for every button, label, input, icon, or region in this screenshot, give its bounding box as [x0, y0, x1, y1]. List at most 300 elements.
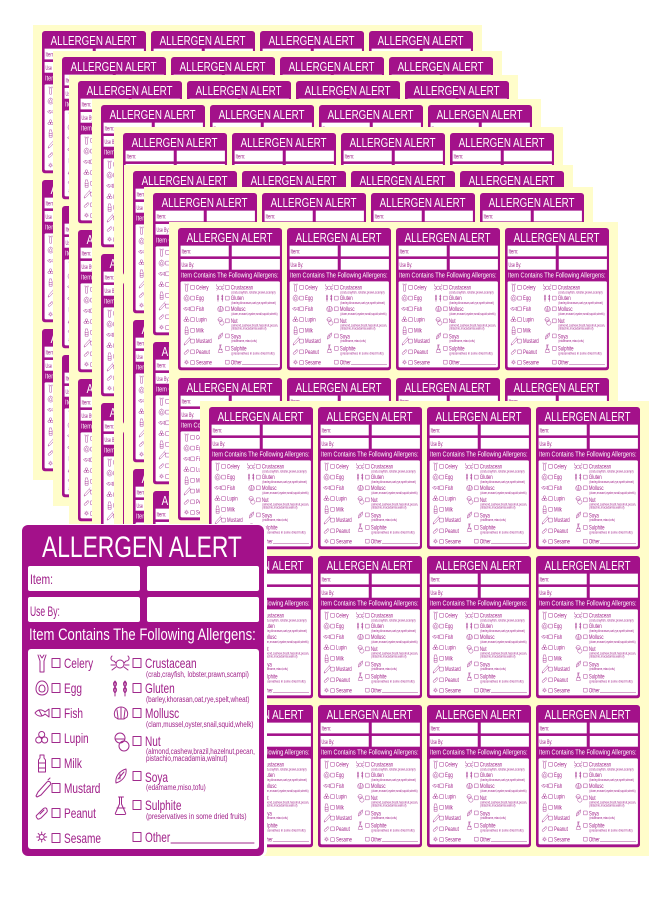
label: sheet 9 row 3 column 3: (barley,khorasan,oat,rye,spelt,wheat): [480, 778, 525, 782]
label header: sheet 8 row 2 column 3: ALLERGEN ALERT: [405, 381, 491, 395]
label header: sheet 4 column 3: Item:: [322, 125, 332, 132]
label header: sheet 1 column 3: ALLERGEN ALERT: [269, 34, 355, 48]
note: nut types line 2: pistachio,macadamia,walnut): [146, 754, 228, 763]
label: sheet 8 row 1 column 4: pistachio,macadamia,walnut): [558, 326, 593, 330]
label: sheet 8 row 1 column 4: Milk: [523, 327, 531, 334]
label: sheet 3 left column middle: [78, 230, 182, 372]
label: sheet 9 row 1 column 4: Mustard: [554, 517, 570, 524]
label: sheet 8 row 1 column 1: Crustacean: [231, 284, 253, 291]
label: sheet 9 row 3 column 2: ALLERGEN ALERT: [327, 708, 413, 722]
label: sheet 9 row 2 column 4: Item Contains The Following Allergens:: [539, 599, 637, 607]
label header: sheet 7 column 4: [480, 193, 584, 335]
label: sheet 9 row 2 column 1: Sesame: [227, 687, 243, 694]
label: sheet 8 row 1 column 4: (crab,crayfish, lobster,prawn,scampi): [558, 290, 603, 294]
label: sheet 8 row 1 column 3: Item Contains The Following Allergens:: [399, 271, 497, 279]
label: sheet 9 row 2 column 2: [318, 556, 422, 698]
label: sheet 9 row 2 column 2: Item:: [321, 576, 331, 583]
label: sheet 8 row 1 column 1: (edamame,miso,tofu): [231, 339, 257, 343]
note: soya types: (edamame,miso,tofu): [146, 783, 206, 792]
panel: sticker sheet 4: [92, 99, 541, 554]
field: item blank: [147, 566, 259, 591]
label: sheet 9 row 1 column 2: (edamame,miso,tofu): [371, 518, 397, 522]
label: sheet 9 row 2 column 3: Soya: [480, 661, 490, 668]
label: sheet 9 row 2 column 3: Use By:: [430, 590, 443, 596]
label: sheet 9 row 3 column 4: (edamame,miso,tofu): [589, 816, 615, 820]
label: sheet 8 row 1 column 2: Mustard: [305, 338, 321, 345]
label: sheet 9 row 1 column 3: Fish: [445, 484, 453, 491]
note: nut types line 1: (almond,cashew,brazil,hazelnut,pecan,: [146, 747, 255, 756]
panel: sticker sheet 7: [144, 187, 593, 642]
label: sheet 9 row 3 column 3: Use By:: [430, 739, 443, 745]
label: sheet 9 row 3 column 3: Mollusc: [480, 782, 495, 789]
label: sheet 9 row 1 column 4: (crab,crayfish, lobster,prawn,scampi): [589, 469, 634, 473]
label: sheet 9 row 2 column 4: Celery: [554, 612, 567, 619]
label: sheet 8 row 1 column 4: Celery: [523, 284, 536, 291]
label: sheet 6 left column bottom: ALLERGEN ALERT: [142, 472, 228, 486]
field label: item: Item:: [30, 571, 53, 587]
label: sheet 9 row 2 column 4: Lupin: [554, 644, 565, 651]
label: sheet 9 row 1 column 2: Other: [371, 538, 382, 545]
label header: sheet 5 column 2: ALLERGEN ALERT: [241, 136, 327, 150]
label: sheet 9 row 2 column 3: Egg: [445, 623, 453, 630]
label: sheet 9 row 2 column 2: Other: [371, 687, 382, 694]
label header: sheet 2 column 4: [389, 57, 493, 199]
label: sheet 9 row 3 column 4: Mollusc: [589, 782, 604, 789]
label: sheet 9 row 1 column 1: Peanut: [227, 527, 241, 534]
label: sheet 8 row 1 column 4: (barley,khorasan,oat,rye,spelt,wheat): [558, 301, 603, 305]
label: sheet 9 row 1 column 1: Other: [262, 538, 273, 545]
label: sheet 5 left column middle: [123, 282, 227, 424]
label: sheet 9 row 2 column 1: Fish: [227, 633, 235, 640]
label: sheet 9 row 3 column 3: Sesame: [445, 836, 461, 843]
label header: sheet 8 row 2 column 3: Item:: [399, 398, 409, 405]
label header: sheet 6 column 2: ALLERGEN ALERT: [251, 174, 337, 188]
label header: sheet 6 column 2: Item:: [245, 191, 255, 198]
label header: sheet 7 column 2: ALLERGEN ALERT: [271, 196, 357, 210]
label: sheet 9 row 3 column 3: Celery: [445, 761, 458, 768]
label: sheet 9 row 2 column 1: (clam,mussel,oyster,snail,squid,whelk): [262, 640, 309, 644]
label: sheet 9 row 1 column 3: Peanut: [445, 527, 459, 534]
label: sheet 8 row 1 column 2: (clam,mussel,oyster,snail,squid,whelk): [340, 312, 387, 316]
label header: sheet 3 column 4: ALLERGEN ALERT: [414, 84, 500, 98]
label: sheet 9 row 3 column 3: Egg: [445, 772, 453, 779]
label: sheet 1 left column bottom: Item:: [45, 349, 55, 356]
label header: sheet 2 column 3: [280, 57, 384, 199]
label: sheet 9 row 2 column 4: Crustacean: [589, 612, 611, 619]
label: sheet 9 row 2 column 2: (almond,cashew,brazil,hazelnut,pecan,: [371, 651, 418, 655]
icon: mollusc: [114, 707, 128, 719]
label: sheet 7 left column top: Use By:: [156, 227, 169, 233]
label: sheet 9 row 2 column 4: Mollusc: [589, 633, 604, 640]
label: sheet 8 row 1 column 3: Sesame: [414, 359, 430, 366]
label: sheet 9 row 1 column 2: (crab,crayfish, lobster,prawn,scampi): [371, 469, 416, 473]
label: sheet 9 row 3 column 4: Lupin: [554, 793, 565, 800]
label: sheet 8 row 2 column 1: ALLERGEN ALERT: [187, 381, 273, 395]
label: sheet 9 row 1 column 1: Use By:: [212, 441, 225, 447]
label: sheet 9 row 1 column 3: Gluten: [480, 474, 493, 481]
label: sheet 9 row 3 column 2: Item:: [321, 725, 331, 732]
label header: sheet 5 column 3: ALLERGEN ALERT: [350, 136, 436, 150]
label: sheet 9 row 2 column 2: ALLERGEN ALERT: [327, 559, 413, 573]
label: sheet 9 row 2 column 3: (almond,cashew,brazil,hazelnut,pecan,: [480, 651, 527, 655]
label: sheet 8 row 1 column 2: (barley,khorasan,oat,rye,spelt,wheat): [340, 301, 385, 305]
label: sheet 1 left column middle: [42, 180, 146, 322]
item: lupin: Lupin: [64, 730, 89, 746]
panel: sticker sheet 9 (front): [200, 401, 649, 856]
panel: sticker sheet 5: [114, 127, 563, 582]
label: sheet 4 left column top: Item Contains The Following Allergens:: [104, 148, 202, 156]
label: sheet 9 row 1 column 2: (preservatives in some dried fruits): [371, 530, 415, 534]
label: sheet 9 row 2 column 3: pistachio,macadamia,walnut): [480, 654, 515, 658]
label: sheet 8 row 1 column 2: Celery: [305, 284, 318, 291]
label header: sheet 8 row 2 column 2: [287, 378, 391, 520]
label: sheet 9 row 2 column 1: Lupin: [227, 644, 238, 651]
label: sheet 8 row 1 column 1: Soya: [231, 333, 241, 340]
label header: sheet 1 column 2: Item:: [154, 51, 164, 58]
label: sheet 9 row 2 column 2: Mustard: [336, 666, 352, 673]
label: sheet 9 row 3 column 2: Milk: [336, 804, 344, 811]
label: sheet 8 row 1 column 1: pistachio,macadamia,walnut): [231, 326, 266, 330]
label: sheet 9 row 1 column 1: Lupin: [227, 495, 238, 502]
label header: sheet 4 column 2: Item:: [213, 125, 223, 132]
label: sheet 9 row 1 column 2: Use By:: [321, 441, 334, 447]
label header: sheet 3 column 3: ALLERGEN ALERT: [305, 84, 391, 98]
label: sheet 9 row 3 column 4: Nut: [589, 794, 596, 801]
label: sheet 9 row 2 column 1: Crustacean: [262, 612, 284, 619]
label: sheet 7 left column bottom: Use By:: [156, 525, 169, 531]
label: sheet 2 left column middle: Item:: [65, 226, 75, 233]
item: peanut: Peanut: [64, 805, 96, 821]
label: sheet 5 left column middle: ALLERGEN ALERT: [132, 285, 218, 299]
label: sheet 8 row 1 column 3: Sulphite: [449, 345, 465, 352]
label: sheet 9 row 3 column 1: Item:: [212, 725, 222, 732]
label header: sheet 5 column 2: [232, 133, 336, 275]
label header: sheet 6 column 3: Item:: [354, 191, 364, 198]
label: sheet 9 row 3 column 4: Gluten: [589, 772, 602, 779]
label: sheet 4 left column top: Item:: [104, 125, 114, 132]
label: sheet 8 row 1 column 2: Nut: [340, 317, 347, 324]
label header: sheet 2 column 4: Item:: [392, 77, 402, 84]
label: sheet 8 row 1 column 2: pistachio,macadamia,walnut): [340, 326, 375, 330]
label: sheet 9 row 1 column 4: Sesame: [554, 538, 570, 545]
label: sheet 8 row 1 column 3: Crustacean: [449, 284, 471, 291]
label: sheet 9 row 3 column 1: (edamame,miso,tofu): [262, 816, 288, 820]
label: sheet 8 row 1 column 1: ALLERGEN ALERT: [187, 231, 273, 245]
label header: sheet 7 column 3: ALLERGEN ALERT: [380, 196, 466, 210]
label: sheet 6 left column middle: [133, 320, 237, 462]
label: sheet 9 row 3 column 3: (edamame,miso,tofu): [480, 816, 506, 820]
icon: celery: [38, 655, 46, 672]
label: sheet 9 row 2 column 2: Nut: [371, 645, 378, 652]
label: sheet 9 row 1 column 1: (clam,mussel,oyster,snail,squid,whelk): [262, 491, 309, 495]
label: sheet 9 row 1 column 1: Sulphite: [262, 524, 278, 531]
label: sheet 9 row 3 column 1: Use By:: [212, 739, 225, 745]
label: sheet 8 row 1 column 1: Sesame: [196, 359, 212, 366]
icon: sesame: [37, 832, 47, 842]
label: sheet 9 row 2 column 3: (crab,crayfish, lobster,prawn,scampi): [480, 618, 525, 622]
label: sheet 9 row 2 column 2: (crab,crayfish, lobster,prawn,scampi): [371, 618, 416, 622]
label: sheet 9 row 2 column 3: ALLERGEN ALERT: [436, 559, 522, 573]
label: sheet 9 row 1 column 2: Sulphite: [371, 524, 387, 531]
label header: sheet 1 column 2: ALLERGEN ALERT: [160, 34, 246, 48]
label: sheet 1 left column bottom: [42, 329, 146, 471]
label: sheet 9 row 2 column 2: Use By:: [321, 590, 334, 596]
label: sheet 7 left column middle: [153, 342, 257, 484]
label: sheet 9 row 3 column 3: Mustard: [445, 815, 461, 822]
label: sheet 9 row 2 column 3: Celery: [445, 612, 458, 619]
label: sheet 4 left column top: ALLERGEN ALERT: [110, 108, 196, 122]
label: sheet 9 row 3 column 4: Use By:: [539, 739, 552, 745]
label: sheet 9 row 3 column 1: (preservatives in some dried fruits): [262, 828, 306, 832]
label: sheet 9 row 1 column 2: Item Contains The Following Allergens:: [321, 450, 419, 458]
note: sulphite sources: (preservatives in some dried fruits): [146, 812, 247, 821]
label header: sheet 6 column 2: [242, 171, 346, 313]
label: sheet 9 row 1 column 1: Item Contains The Following Allergens:: [212, 450, 310, 458]
label: sheet 4 left column middle: [101, 254, 205, 396]
label header: sheet 7 column 4: Item:: [483, 213, 493, 220]
label: sheet 4 left column middle: ALLERGEN ALERT: [110, 257, 196, 271]
label: sheet 9 row 3 column 3: (preservatives in some dried fruits): [480, 828, 524, 832]
label: sheet 9 row 2 column 3: Other: [480, 687, 491, 694]
label: sheet 9 row 1 column 4: (almond,cashew,brazil,hazelnut,pecan,: [589, 502, 636, 506]
label: sheet 1 left column bottom: ALLERGEN ALERT: [51, 332, 137, 346]
label: sheet 9 row 1 column 4: Other: [589, 538, 600, 545]
label header: sheet 1 column 3: [260, 31, 364, 173]
label: sheet 9 row 2 column 1: (edamame,miso,tofu): [262, 667, 288, 671]
label: sheet 9 row 3 column 1: (crab,crayfish, lobster,prawn,scampi): [262, 767, 307, 771]
label: sheet 9 row 3 column 2: Sesame: [336, 836, 352, 843]
label: sheet 9 row 1 column 2: Egg: [336, 474, 344, 481]
label: sheet 8 row 1 column 3: Soya: [449, 333, 459, 340]
label: sheet 9 row 2 column 1: Item Contains The Following Allergens:: [212, 599, 310, 607]
label: sheet 1 left column top: [42, 31, 146, 173]
label: sheet 9 row 3 column 2: (preservatives in some dried fruits): [371, 828, 415, 832]
label header: sheet 5 column 3: Item:: [344, 153, 354, 160]
icon: crustacean: [111, 656, 129, 670]
label: sheet 3 left column middle: Item Contains The Following Allergens:: [81, 273, 179, 281]
label: sheet 9 row 2 column 4: Soya: [589, 661, 599, 668]
label: sheet 2 left column bottom: Item:: [65, 375, 75, 382]
label: sheet 9 row 1 column 3: ALLERGEN ALERT: [436, 410, 522, 424]
label: sheet 3 left column middle: Use By:: [81, 264, 94, 270]
label header: sheet 6 column 4: [460, 171, 564, 313]
label: sheet 8 row 1 column 1: Lupin: [196, 316, 207, 323]
label header: sheet 8 row 2 column 4: [505, 378, 609, 520]
label: sheet 8 row 1 column 2: Item Contains The Following Allergens:: [290, 271, 388, 279]
label: sheet 8 row 1 column 3: (edamame,miso,tofu): [449, 339, 475, 343]
label header: sheet 7 column 2: [262, 193, 366, 335]
label: sheet 9 row 3 column 3: [427, 705, 531, 847]
label: sheet 9 row 1 column 4: Egg: [554, 474, 562, 481]
label: sheet 9 row 1 column 2: Celery: [336, 463, 349, 470]
label: sheet 5 left column bottom: Item:: [126, 451, 136, 458]
label: sheet 9 row 3 column 3: Crustacean: [480, 761, 502, 768]
label: sheet 9 row 3 column 3: Nut: [480, 794, 487, 801]
note: mollusc types: (clam,mussel,oyster,snail,squid,whelk): [146, 720, 253, 729]
label: sheet 8 row 1 column 1: Mustard: [196, 338, 212, 345]
label: sheet 9 row 1 column 4: Crustacean: [589, 463, 611, 470]
label: sheet 8 row 1 column 3: Fish: [414, 305, 422, 312]
label: sheet 2 left column top: ALLERGEN ALERT: [71, 60, 157, 74]
label: sheet 9 row 2 column 2: Mollusc: [371, 633, 386, 640]
label: sheet 9 row 3 column 3: Gluten: [480, 772, 493, 779]
label: sheet 9 row 3 column 4: Crustacean: [589, 761, 611, 768]
label: sheet 9 row 2 column 1: Mustard: [227, 666, 243, 673]
label: sheet 3 left column bottom: Item:: [81, 399, 91, 406]
label: sheet 9 row 3 column 1: pistachio,macadamia,walnut): [262, 803, 297, 807]
label: sheet 6 left column top: [133, 171, 237, 313]
label: sheet 7 left column top: [153, 193, 257, 335]
label: sheet 8 row 1 column 3: Use By:: [399, 262, 412, 268]
label: sheet 9 row 2 column 1: ALLERGEN ALERT: [218, 559, 304, 573]
label: sheet 9 row 3 column 4: [536, 705, 640, 847]
label: sheet 9 row 3 column 3: pistachio,macadamia,walnut): [480, 803, 515, 807]
label: sheet 9 row 3 column 2: (almond,cashew,brazil,hazelnut,pecan,: [371, 800, 418, 804]
label: sheet 9 row 1 column 4: Celery: [554, 463, 567, 470]
label: sheet 9 row 1 column 4: Milk: [554, 506, 562, 513]
label: sheet 4 left column middle: Item Contains The Following Allergens:: [104, 297, 202, 305]
label: sheet 8 row 2 column 1: Milk: [196, 477, 204, 484]
label: sheet 9 row 3 column 3: Lupin: [445, 793, 456, 800]
label: sheet 9 row 1 column 1: [209, 407, 313, 549]
label: sheet 8 row 2 column 1: Item:: [181, 398, 191, 405]
item: nut: Nut: [145, 733, 161, 749]
label: sheet 6 left column middle: ALLERGEN ALERT: [142, 323, 228, 337]
label: sheet 9 row 1 column 2: Gluten: [371, 474, 384, 481]
label: sheet 9 row 2 column 1: (barley,khorasan,oat,rye,spelt,wheat): [262, 629, 307, 633]
label: sheet 9 row 2 column 2: (barley,khorasan,oat,rye,spelt,wheat): [371, 629, 416, 633]
label: sheet 9 row 3 column 4: Item:: [539, 725, 549, 732]
label header: sheet 4 column 4: [428, 105, 532, 247]
label: sheet 9 row 1 column 3: Other: [480, 538, 491, 545]
label: sheet 9 row 3 column 1: Lupin: [227, 793, 238, 800]
icon: mustard: [36, 778, 51, 797]
label: sheet 4 left column bottom: Use By:: [104, 437, 117, 443]
label: sheet 9 row 2 column 4: Fish: [554, 633, 562, 640]
label: sheet 9 row 3 column 2: Egg: [336, 772, 344, 779]
label: sheet 9 row 1 column 3: (almond,cashew,brazil,hazelnut,pecan,: [480, 502, 527, 506]
label: sheet 9 row 3 column 2: (edamame,miso,tofu): [371, 816, 397, 820]
label: sheet 8 row 2 column 1: Egg: [196, 445, 204, 452]
label: sheet 9 row 1 column 3: Soya: [480, 512, 490, 519]
label: sheet 1 left column top: Use By:: [45, 65, 58, 71]
label: sheet 9 row 1 column 4: (clam,mussel,oyster,snail,squid,whelk): [589, 491, 636, 495]
label: sheet 8 row 1 column 4: (almond,cashew,brazil,hazelnut,pecan,: [558, 323, 605, 327]
label: sheet 4 left column bottom: Item:: [104, 423, 114, 430]
label: sheet 9 row 2 column 1: pistachio,macadamia,walnut): [262, 654, 297, 658]
icon: nut: [115, 733, 129, 751]
label: sheet 6 left column bottom: Use By:: [136, 503, 149, 509]
label: sheet 4 left column top: Use By:: [104, 139, 117, 145]
label: sheet 9 row 3 column 3: Item Contains The Following Allergens:: [430, 748, 528, 756]
label: sheet 9 row 3 column 2: Use By:: [321, 739, 334, 745]
label: sheet 3 left column top: Item Contains The Following Allergens:: [81, 124, 179, 132]
label: sheet 7 left column bottom: Item Contains The Following Allergens:: [156, 534, 254, 542]
label: sheet 9 row 2 column 4: Egg: [554, 623, 562, 630]
label header: sheet 8 row 2 column 2: Item:: [290, 398, 300, 405]
label: sheet 9 row 1 column 1: Sesame: [227, 538, 243, 545]
label: sheet 9 row 3 column 4: Celery: [554, 761, 567, 768]
label: sheet 9 row 3 column 2: Mollusc: [371, 782, 386, 789]
label: sheet 9 row 2 column 4: pistachio,macadamia,walnut): [589, 654, 624, 658]
label: sheet 9 row 1 column 3: (barley,khorasan,oat,rye,spelt,wheat): [480, 480, 525, 484]
label: sheet 8 row 1 column 2: Lupin: [305, 316, 316, 323]
label: sheet 8 row 1 column 3: Peanut: [414, 348, 428, 355]
label: sheet 8 row 1 column 2: Soya: [340, 333, 350, 340]
panel: sticker sheet 1 (back): [33, 25, 482, 480]
label: sheet 8 row 1 column 3: Milk: [414, 327, 422, 334]
label: sheet 7 left column middle: Item Contains The Following Allergens:: [156, 385, 254, 393]
label: sheet 1 left column middle: Item:: [45, 200, 55, 207]
label: sheet 9 row 1 column 3: Mollusc: [480, 484, 495, 491]
label: sheet 9 row 1 column 3: Celery: [445, 463, 458, 470]
label: sheet 8 row 1 column 1: Gluten: [231, 295, 244, 302]
label: sheet 7 left column middle: ALLERGEN ALERT: [162, 345, 248, 359]
label: sheet 9 row 3 column 2: Item Contains The Following Allergens:: [321, 748, 419, 756]
label: sheet 9 row 2 column 3: (barley,khorasan,oat,rye,spelt,wheat): [480, 629, 525, 633]
label: sheet 9 row 3 column 1: Other: [262, 836, 273, 843]
label header: sheet 4 column 3: [319, 105, 423, 247]
label: sheet 9 row 1 column 1: pistachio,macadamia,walnut): [262, 505, 297, 509]
label: sheet 9 row 2 column 4: (preservatives in some dried fruits): [589, 679, 633, 683]
label: sheet 9 row 3 column 3: Fish: [445, 782, 453, 789]
label: sheet 2 left column bottom: [62, 355, 166, 497]
label: sheet 9 row 1 column 4: Gluten: [589, 474, 602, 481]
label: sheet 9 row 3 column 4: Mustard: [554, 815, 570, 822]
label: sheet 9 row 3 column 1: Milk: [227, 804, 235, 811]
label: sheet 9 row 2 column 4: (crab,crayfish, lobster,prawn,scampi): [589, 618, 634, 622]
label: sheet 9 row 3 column 4: Sesame: [554, 836, 570, 843]
label header: sheet 8 row 2 column 4: ALLERGEN ALERT: [514, 381, 600, 395]
label: sheet 9 row 1 column 2: Mollusc: [371, 484, 386, 491]
label: sheet 9 row 2 column 2: Gluten: [371, 623, 384, 630]
icon: gluten: [114, 681, 126, 696]
item: egg: Egg: [64, 680, 82, 696]
field: use by: [28, 597, 140, 622]
label: sheet 8 row 1 column 3: (preservatives in some dried fruits): [449, 351, 493, 355]
label: sheet 9 row 2 column 1: (preservatives in some dried fruits): [262, 679, 306, 683]
label: sheet 3 left column bottom: ALLERGEN ALERT: [87, 382, 173, 396]
label: sheet 1 left column middle: Use By:: [45, 214, 58, 220]
label: sheet 9 row 3 column 2: Fish: [336, 782, 344, 789]
item: sulphite: Sulphite: [145, 797, 181, 813]
label: sheet 2 left column top: Item Contains The Following Allergens:: [65, 100, 163, 108]
label: sheet 9 row 1 column 1: (barley,khorasan,oat,rye,spelt,wheat): [262, 480, 307, 484]
label: sheet 9 row 1 column 3: Lupin: [445, 495, 456, 502]
label: sheet 8 row 1 column 1: (clam,mussel,oyster,snail,squid,whelk): [231, 312, 278, 316]
label: sheet 3 left column middle: Item:: [81, 250, 91, 257]
label: sheet 9 row 3 column 3: Peanut: [445, 825, 459, 832]
label: sheet 9 row 1 column 3: Crustacean: [480, 463, 502, 470]
label: sheet 9 row 2 column 3: Fish: [445, 633, 453, 640]
label: sheet 8 row 1 column 3: Celery: [414, 284, 427, 291]
label: sheet 1 left column top: Item:: [45, 51, 55, 58]
label: sheet 8 row 1 column 4: (edamame,miso,tofu): [558, 339, 584, 343]
label: sheet 8 row 2 column 1: [178, 378, 282, 520]
label: sheet 8 row 1 column 1: Milk: [196, 327, 204, 334]
panel: large close-up allergen label: [22, 525, 264, 856]
label: sheet 1 left column bottom: Item Contains The Following Allergens:: [45, 372, 143, 380]
label header: sheet 8 row 2 column 3: [396, 378, 500, 520]
label: sheet 7 left column top: ALLERGEN ALERT: [162, 196, 248, 210]
label: sheet 9 row 3 column 1: Mollusc: [262, 782, 277, 789]
label: sheet 9 row 2 column 1: Mollusc: [262, 633, 277, 640]
item: mollusc: Mollusc: [145, 705, 179, 721]
label: sheet 8 row 1 column 4: Egg: [523, 295, 531, 302]
label: sheet 9 row 2 column 4: Sulphite: [589, 673, 605, 680]
label: sheet 9 row 3 column 2: (clam,mussel,oyster,snail,squid,whelk): [371, 789, 418, 793]
label header: sheet 2 column 2: [171, 57, 275, 199]
